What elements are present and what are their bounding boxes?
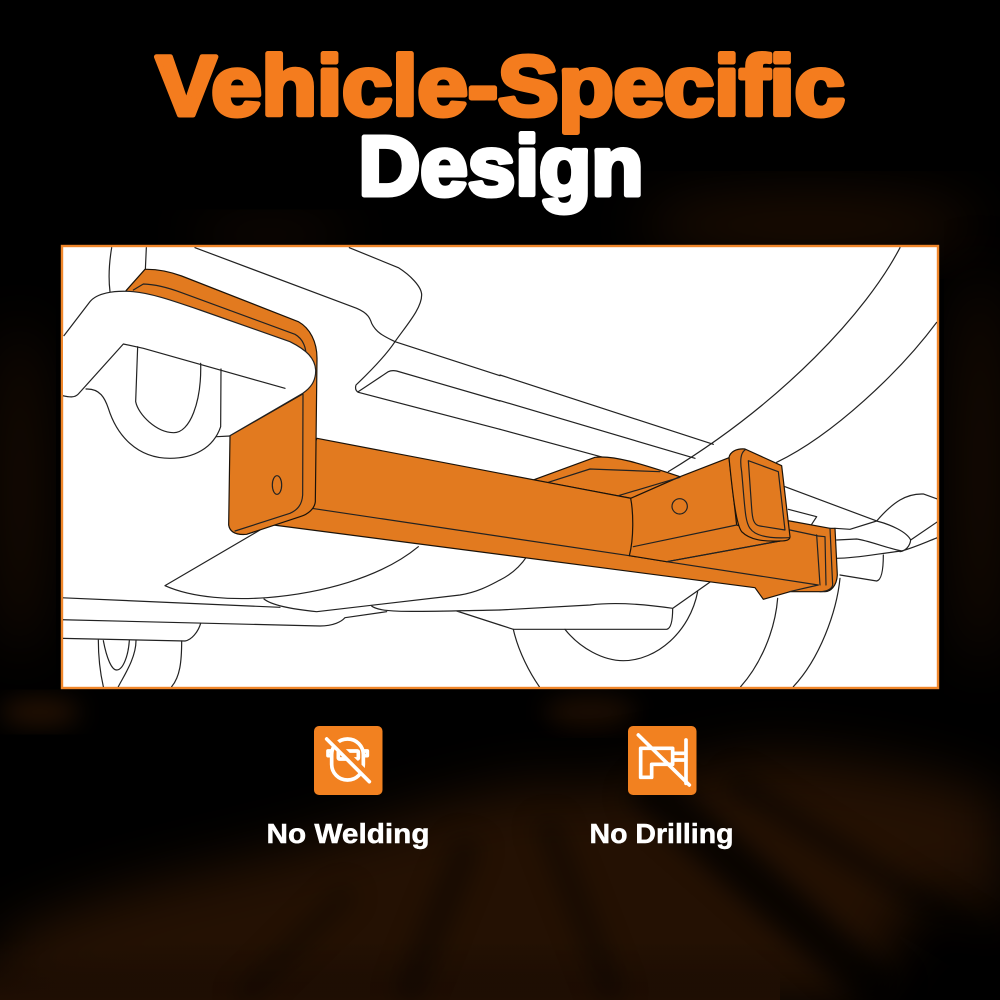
vehicle underbody outlines, right side (500, 248, 940, 687)
label: No Welding: No Welding (266, 818, 430, 849)
feature: no drilling (590, 726, 734, 849)
icon: no welding (314, 726, 382, 795)
bracket plate (126, 269, 317, 534)
hitch crossbar (273, 438, 837, 599)
receiver assembly (618, 449, 790, 562)
receiver collar (729, 449, 790, 541)
bracket mounting hole (272, 476, 282, 494)
rear plate behind receiver (533, 457, 680, 498)
title (156, 39, 845, 213)
label: No Drilling: No Drilling (590, 818, 734, 849)
title line 2: Design: Design (358, 119, 644, 213)
frame arm overlapping bracket (60, 291, 316, 437)
title line 1: Vehicle-Specific: Vehicle-Specific (156, 39, 845, 133)
vehicle underbody outlines, left side (60, 248, 500, 687)
main crossbar tube (273, 438, 837, 599)
receiver opening (748, 461, 785, 530)
panel: hitch illustration (60, 246, 940, 688)
icon: no drilling (628, 726, 696, 795)
receiver tube (629, 458, 780, 562)
feature: no welding (266, 726, 430, 849)
side mounting bracket and frame arm (60, 269, 317, 534)
receiver pin hole (672, 499, 687, 514)
